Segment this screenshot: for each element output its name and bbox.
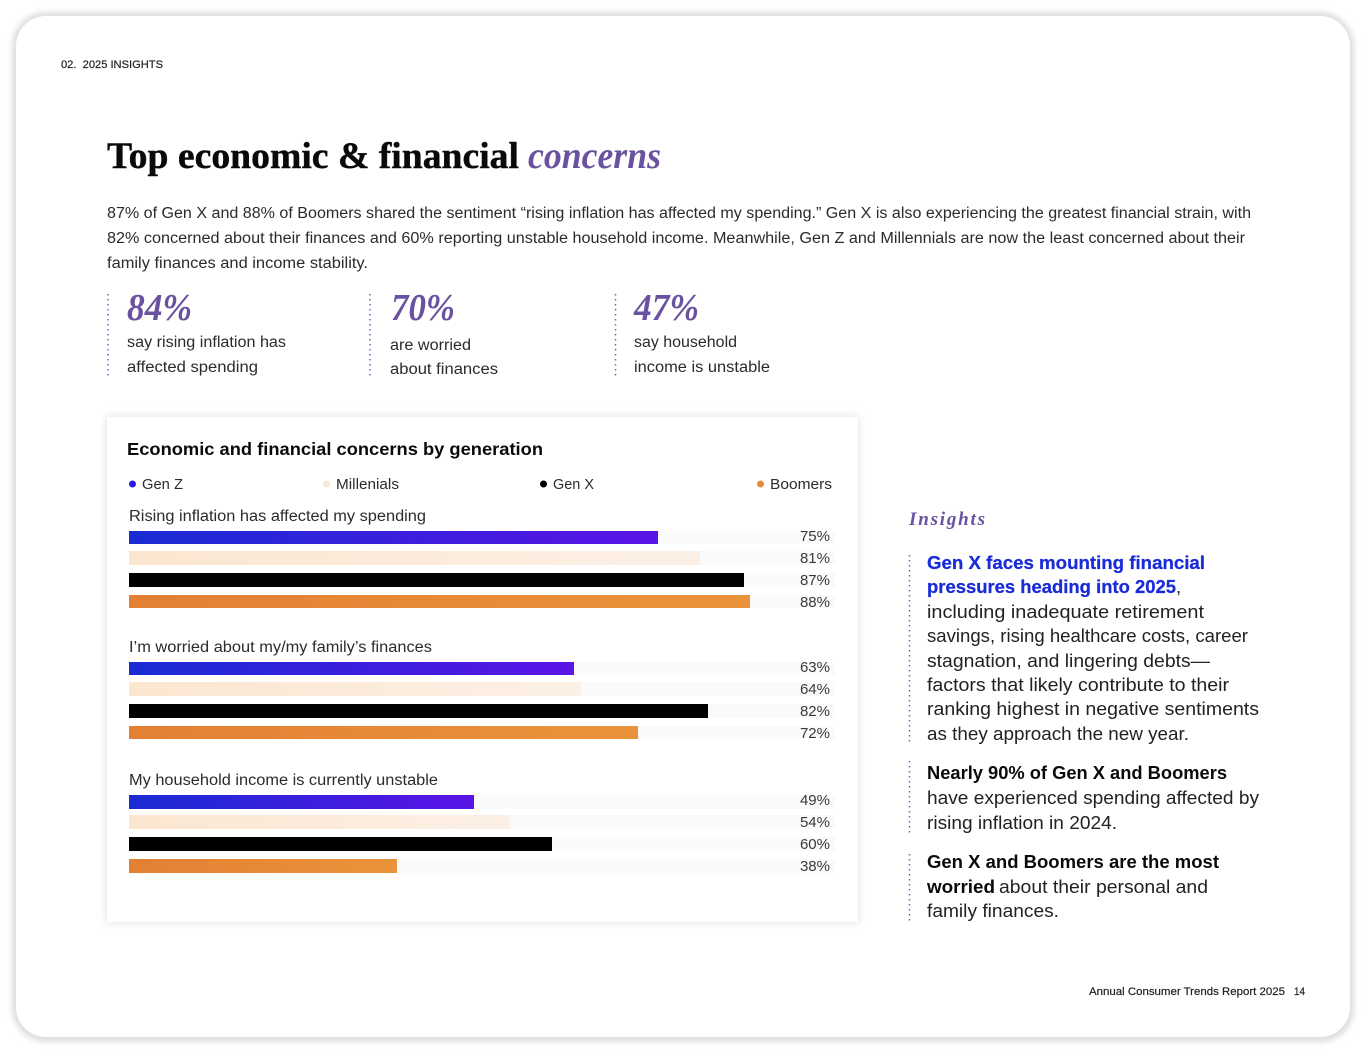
chart heading: Economic and financial concerns by generation — [127, 439, 543, 459]
bar group: rising inflation: 87% — [800, 572, 830, 589]
bar group: income unstable — [129, 772, 835, 875]
title: Top economic & financial — [107, 136, 519, 177]
bar group: rising inflation — [129, 508, 835, 611]
insight: Gen X financial pressures: factors that likely contribute to their — [927, 674, 1229, 695]
insight: Gen X financial pressures: pressures heading into 2025 — [927, 576, 1176, 597]
legend: Millenials — [336, 477, 399, 493]
stat: 84%: 84% — [127, 287, 192, 329]
insight: Gen X financial pressures: including inadequate retirement — [927, 601, 1204, 622]
insight: Gen X financial pressures: , — [1176, 576, 1181, 597]
stat: 70% — [370, 287, 498, 379]
legend: Boomers — [770, 477, 832, 493]
intro paragraph: family finances and income stability. — [107, 255, 368, 272]
bar group: rising inflation: 88% — [800, 594, 830, 611]
insight: most worried: about their personal and — [999, 876, 1208, 897]
panel: chart by generation — [106, 416, 859, 923]
stat: 70%: about finances — [390, 361, 498, 378]
legend: Gen X — [553, 477, 594, 493]
bar group: rising inflation: Rising inflation has affected my spending — [129, 508, 426, 525]
bar group: rising inflation: 75% — [800, 528, 830, 545]
stat: 47% — [616, 287, 770, 379]
intro paragraph: 82% concerned about their finances and 60% reporting unstable household income. Meanwhile, Gen Z and Millennials are now the least concerned about their — [107, 230, 1245, 247]
bar group: rising inflation: 81% — [800, 550, 830, 567]
insight: nearly 90%: Nearly 90% of Gen X and Boomers — [927, 762, 1227, 783]
footer: 14 — [1294, 986, 1305, 998]
bar group: worried about finances: I’m worried about my/my family’s finances — [129, 639, 432, 656]
stat: 47%: income is unstable — [634, 359, 770, 376]
insight: Gen X financial pressures — [910, 552, 1259, 744]
bar group: income unstable: 49% — [800, 792, 830, 809]
stat: 84%: affected spending — [127, 359, 258, 376]
insight: Gen X financial pressures: Gen X faces mounting financial — [927, 552, 1205, 573]
title: concerns — [528, 135, 661, 177]
bar group: income unstable: 60% — [800, 836, 830, 853]
bar group: worried about finances — [129, 639, 835, 742]
bar group: worried about finances: 64% — [800, 681, 830, 698]
insight: most worried: Gen X and Boomers are the most — [927, 851, 1219, 872]
bar group: income unstable: 38% — [800, 858, 830, 875]
insight: nearly 90%: rising inflation in 2024. — [927, 812, 1117, 833]
stat: 47%: 47% — [633, 287, 699, 329]
footer: Annual Consumer Trends Report 2025 — [1089, 986, 1285, 998]
insight: Gen X financial pressures: savings, rising healthcare costs, career — [927, 625, 1248, 646]
insight: most worried — [910, 851, 1219, 922]
insight: nearly 90% — [910, 761, 1260, 835]
intro paragraph: 87% of Gen X and 88% of Boomers shared the sentiment “rising inflation has affected my spending.” Gen X is also experiencing the greatest financial strain, with — [107, 205, 1251, 222]
stat: 70%: 70% — [391, 287, 455, 329]
stat: 47%: say household — [634, 334, 737, 351]
insight: most worried: family finances. — [927, 900, 1059, 921]
section label: 02. 2025 INSIGHTS — [61, 59, 163, 71]
insight: nearly 90%: have experienced spending affected by — [927, 787, 1260, 808]
bar group: worried about finances: 82% — [800, 703, 830, 720]
bar group: worried about finances: 63% — [800, 659, 830, 676]
legend — [129, 477, 832, 493]
insight: Gen X financial pressures: as they approach the new year. — [927, 723, 1189, 744]
legend: Gen Z — [142, 477, 183, 493]
stat: 84%: say rising inflation has — [127, 334, 286, 351]
insights heading: Insights — [908, 509, 985, 530]
bar group: worried about finances: 72% — [800, 725, 830, 742]
stat: 84% — [108, 287, 286, 379]
insight: most worried: worried — [926, 876, 995, 897]
insight: Gen X financial pressures: ranking highest in negative sentiments — [927, 698, 1259, 719]
stat: 70%: are worried — [390, 337, 471, 354]
insight: Gen X financial pressures: stagnation, and lingering debts— — [927, 650, 1211, 671]
bar group: income unstable: My household income is currently unstable — [129, 772, 438, 789]
bar group: income unstable: 54% — [800, 814, 830, 831]
intro paragraph — [107, 205, 1251, 272]
